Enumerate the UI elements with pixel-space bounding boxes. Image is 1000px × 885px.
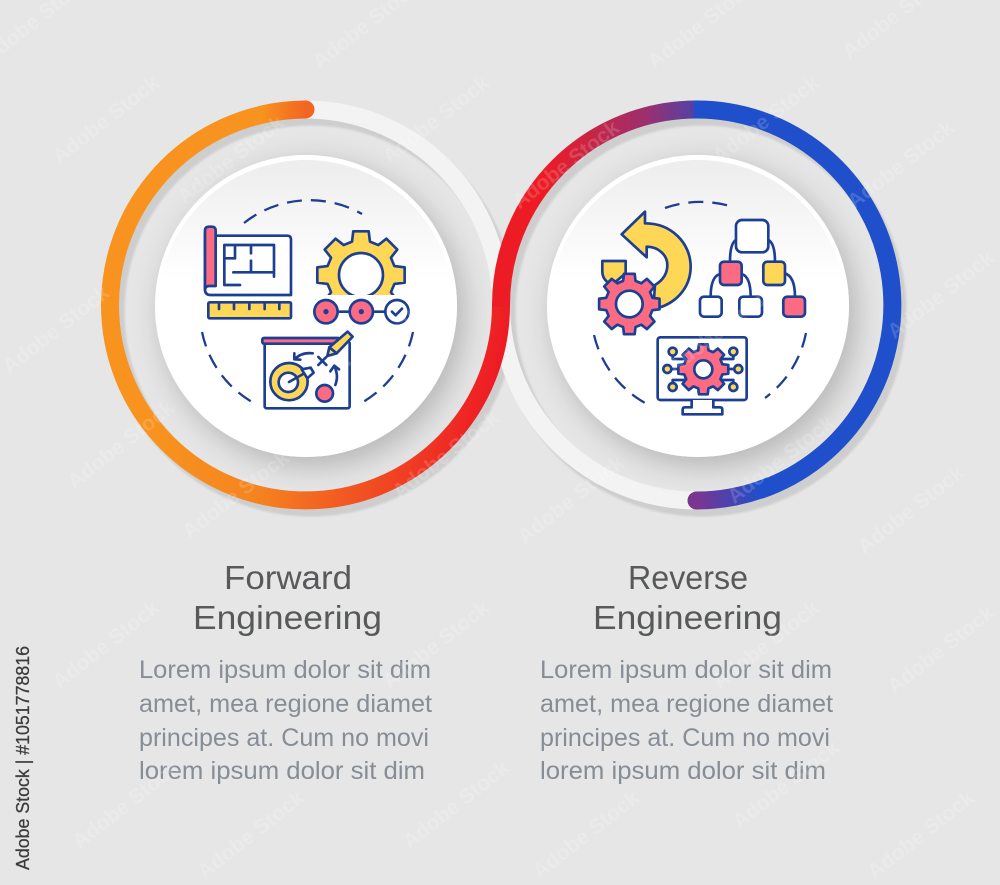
text block: reverse description: principes at. Cum no movi xyxy=(540,724,830,752)
watermarks: Adobe Stock xyxy=(68,756,184,853)
heading: reverse engineering: Engineering xyxy=(593,599,782,636)
text block: reverse description: Lorem ipsum dolor sit dim xyxy=(540,656,832,684)
text block: forward description: amet, mea regione diamet xyxy=(139,690,432,718)
watermarks: Adobe Stock xyxy=(398,756,514,853)
icon: circular arrow xyxy=(602,212,691,309)
watermarks: Adobe Stock xyxy=(663,281,779,378)
watermarks: Adobe Stock xyxy=(378,596,494,693)
watermarks: Adobe Stock xyxy=(63,396,179,493)
icon: gear process xyxy=(314,231,409,323)
watermarks: Adobe Stock xyxy=(883,246,999,343)
heading: forward engineering: Engineering xyxy=(193,599,382,636)
icon: ruler xyxy=(208,302,291,318)
watermarks: Adobe Stock xyxy=(513,451,629,548)
watermarks: Adobe Stock xyxy=(48,596,164,693)
heading: reverse engineering: Reverse xyxy=(628,559,748,596)
icon: computer monitor with gear xyxy=(658,337,747,414)
watermarks: Adobe Stock xyxy=(173,111,289,208)
text block: forward description xyxy=(139,656,432,785)
watermarks: Adobe Stock xyxy=(863,786,979,883)
watermarks: Adobe Stock xyxy=(883,601,999,698)
watermarks: Adobe Stock xyxy=(708,71,824,168)
ring track: unfilled portions xyxy=(306,110,696,500)
text block: reverse description: amet, mea regione diamet xyxy=(540,690,833,718)
watermarks: Adobe Stock xyxy=(178,446,294,543)
icon: target plan board xyxy=(262,332,353,408)
watermarks: Adobe Stock xyxy=(728,736,844,833)
dashed circle: forward xyxy=(202,200,413,402)
icon: hierarchy tree xyxy=(700,220,805,317)
text block: forward description: lorem ipsum dolor sit dim xyxy=(139,757,425,785)
watermarks: Adobe Stock xyxy=(378,71,494,168)
watermarks: Adobe Stock xyxy=(193,786,309,883)
text block: forward description: principes at. Cum no movi xyxy=(139,724,429,752)
panel: reverse engineering disc xyxy=(547,155,849,457)
progress ribbon: orange to red to blue xyxy=(110,109,892,500)
watermarks: Adobe Stock xyxy=(723,411,839,508)
text block: reverse description xyxy=(540,656,833,785)
heading: reverse engineering xyxy=(593,559,782,636)
panel: forward engineering disc xyxy=(155,155,457,457)
heading: forward engineering: Forward xyxy=(224,559,352,596)
icons: forward engineering xyxy=(205,227,409,408)
text block: forward description: Lorem ipsum dolor sit dim xyxy=(139,656,431,684)
text block: reverse description: lorem ipsum dolor sit dim xyxy=(540,757,826,785)
icon: blueprint xyxy=(205,227,291,295)
watermarks: Adobe Stock xyxy=(48,71,164,168)
heading: forward engineering xyxy=(193,559,382,636)
watermarks: Adobe Stock xyxy=(333,281,449,378)
watermarks: Adobe Stock xyxy=(853,461,969,558)
watermarks: Adobe Stock xyxy=(508,116,624,213)
watermarks: Adobe Stock xyxy=(528,786,644,883)
watermarks: Adobe Stock xyxy=(0,281,114,378)
dashed circle: reverse xyxy=(594,202,806,403)
ring shadow xyxy=(116,116,898,508)
stock credit: Adobe Stock | #1051778816 xyxy=(13,646,33,870)
icon: red gear xyxy=(599,274,660,334)
watermarks: Adobe Stock xyxy=(843,116,959,213)
icons: reverse engineering xyxy=(599,212,805,414)
watermarks: Adobe Stock xyxy=(388,406,504,503)
watermarks: Adobe Stock xyxy=(708,596,824,693)
